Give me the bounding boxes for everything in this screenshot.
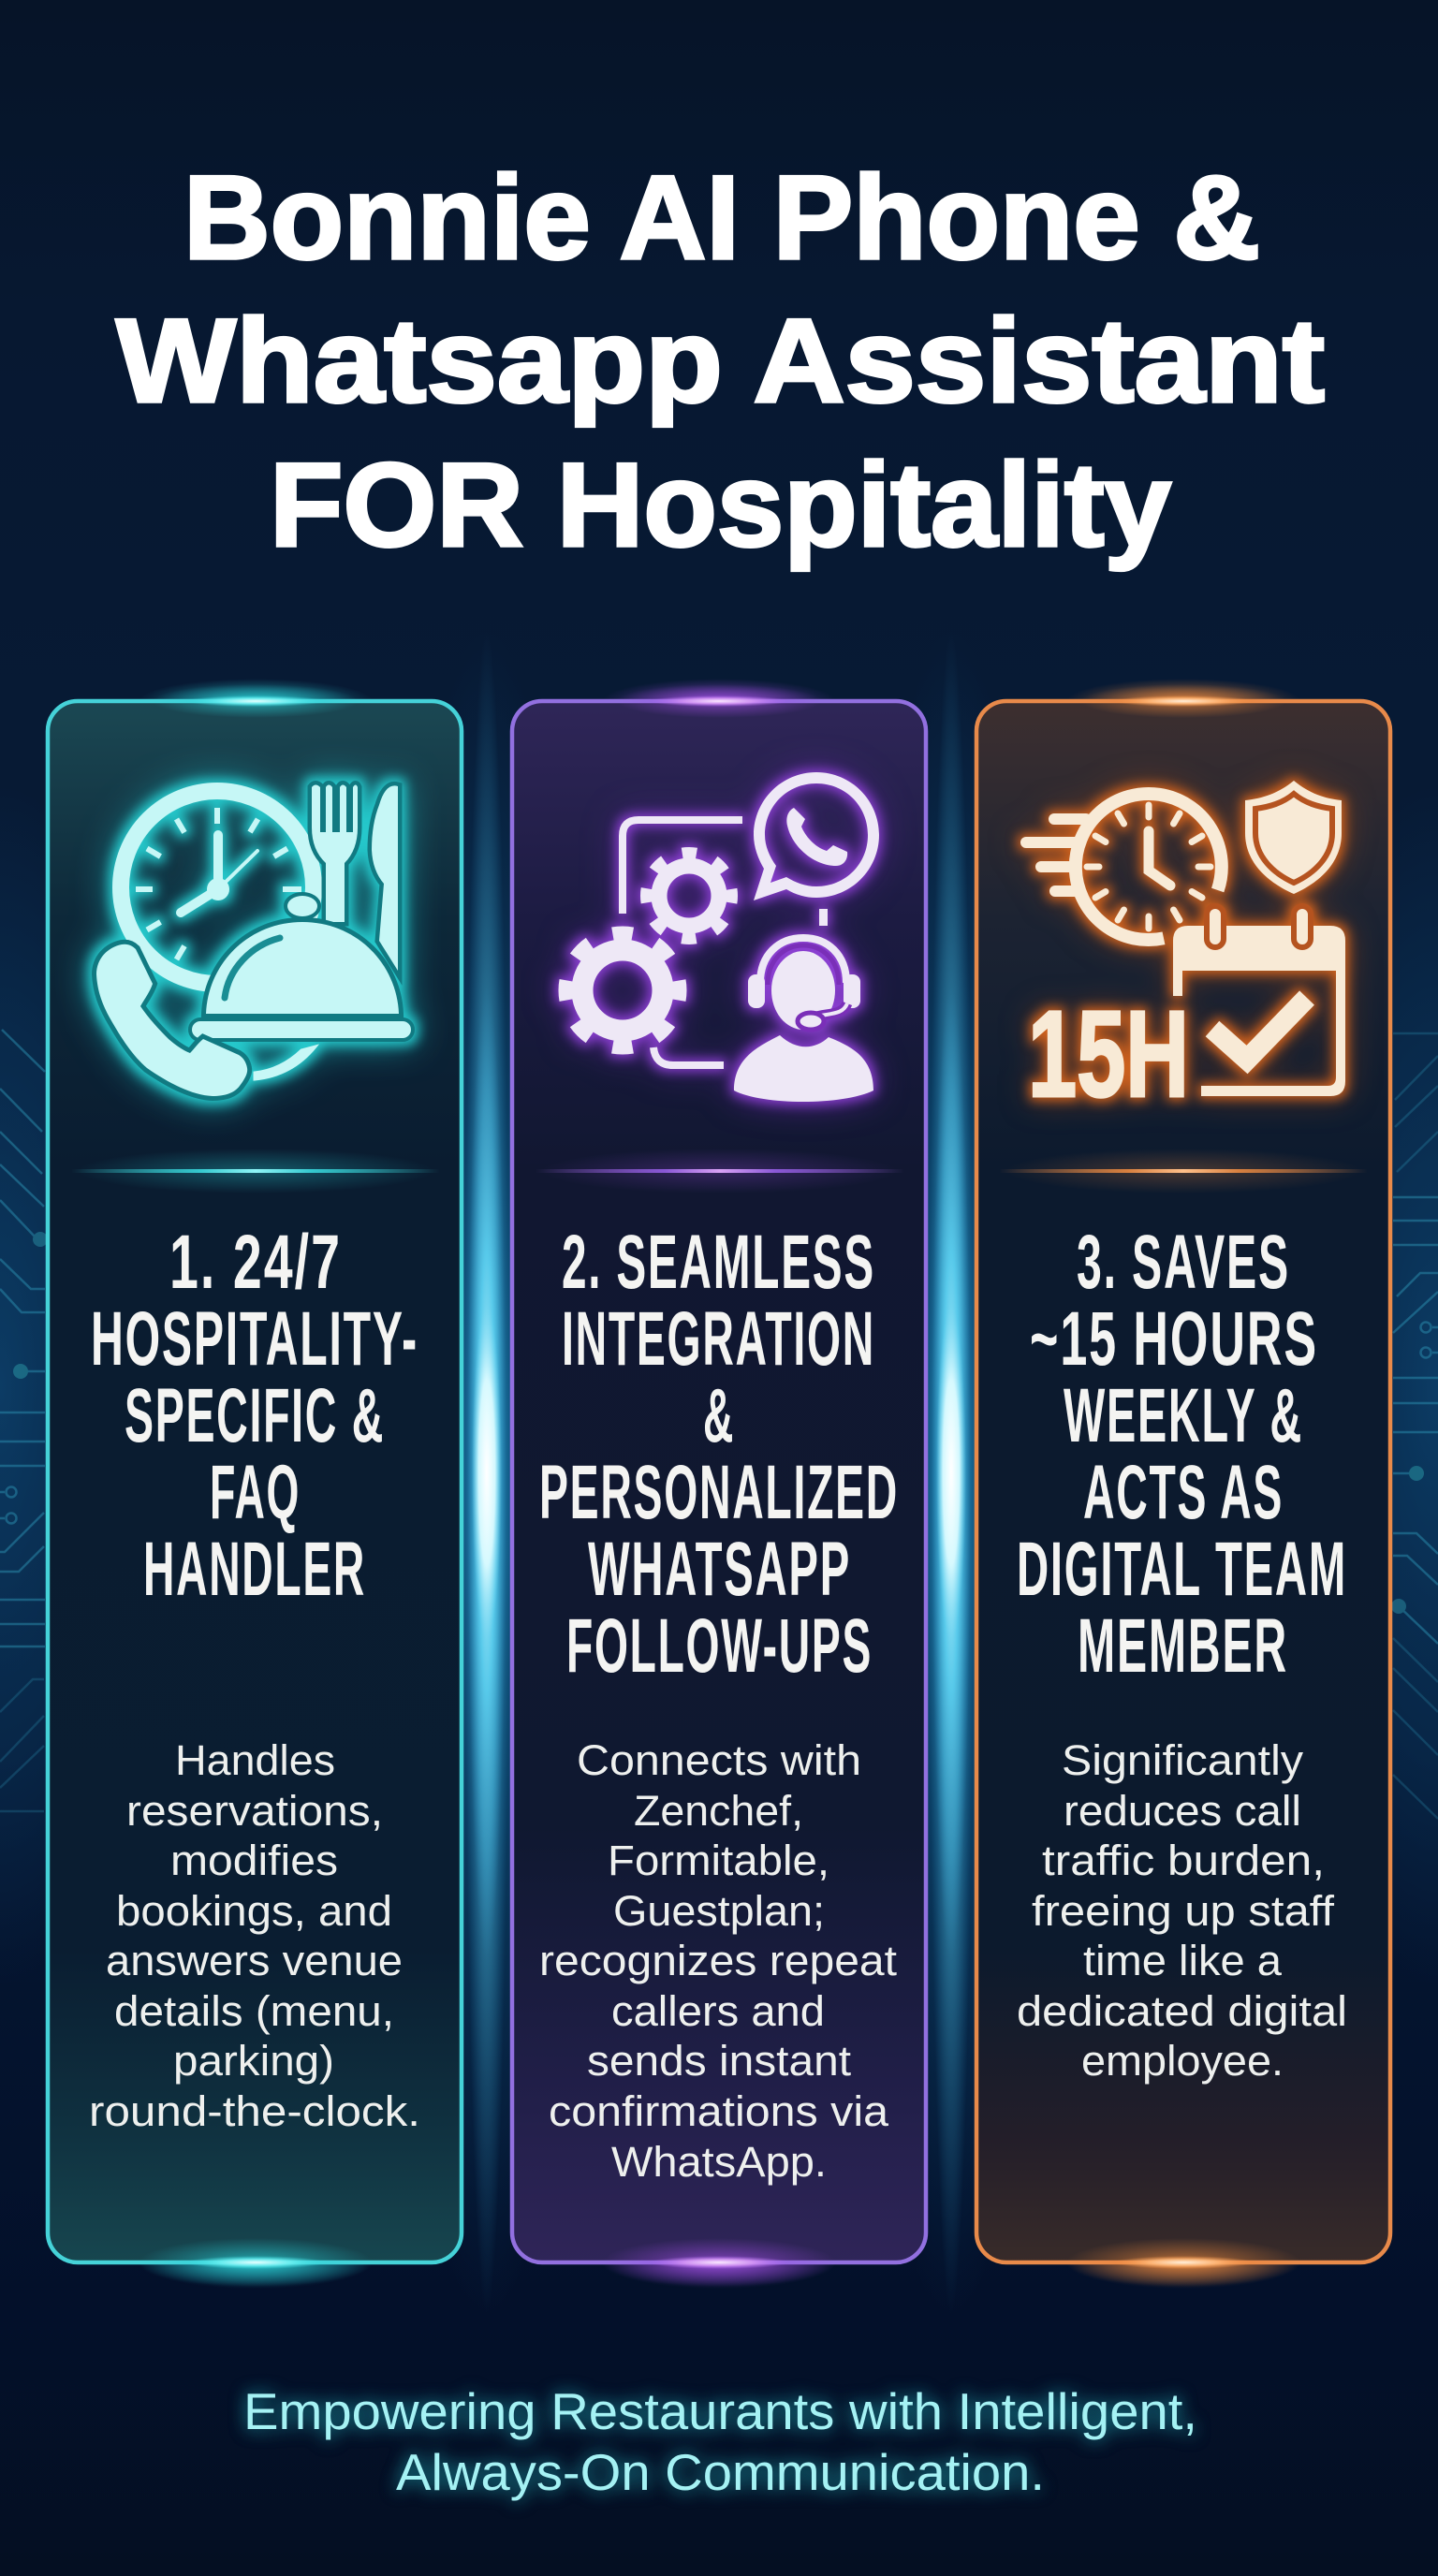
body text: bookings, and — [116, 1887, 392, 1935]
heading: FOLLOW-UPS — [566, 1603, 873, 1689]
icon: fast clock, shield, calendar and 15H: 15H — [1028, 985, 1189, 1122]
body text: freeing up staff — [1032, 1887, 1335, 1935]
footer tagline: Always-On Communication. — [396, 2443, 1045, 2501]
heading — [91, 1220, 418, 1612]
light beam: right separator — [844, 630, 1059, 2315]
heading — [1017, 1220, 1347, 1689]
heading: INTEGRATION — [562, 1296, 875, 1382]
body text: time like a — [1083, 1937, 1283, 1984]
body text: callers and — [611, 1987, 825, 2035]
body text: sends instant — [587, 2037, 852, 2085]
heading: FAQ — [210, 1450, 301, 1535]
card frame — [976, 679, 1390, 2289]
heading: PERSONALIZED — [539, 1450, 899, 1535]
light beam: left separator — [379, 630, 594, 2315]
small gear — [647, 854, 731, 938]
heading: & — [703, 1373, 735, 1458]
panel: 24/7 hospitality handler — [48, 679, 462, 2289]
icon: clock, phone, cloche and cutlery — [96, 784, 411, 1096]
body text: confirmations via — [549, 2087, 889, 2135]
large gear — [566, 934, 679, 1046]
heading: WHATSAPP — [588, 1527, 851, 1612]
headset agent — [760, 938, 846, 983]
divider — [71, 1149, 440, 1193]
body text: answers venue — [106, 1937, 403, 1984]
body text — [1017, 1736, 1347, 2085]
icon: fast clock, shield, calendar and 15H — [1026, 781, 1345, 1122]
heading: 1. 24/7 — [169, 1220, 342, 1305]
heading: MEMBER — [1078, 1603, 1288, 1689]
heading — [539, 1220, 899, 1689]
card frame — [512, 679, 926, 2289]
footer tagline: Empowering Restaurants with Intelligent, — [243, 2382, 1197, 2440]
title: Bonnie AI Phone & — [183, 151, 1260, 284]
body text: reduces call — [1064, 1787, 1301, 1835]
body text: details (menu, — [114, 1987, 394, 2035]
panel: saves 15 hours weekly — [976, 679, 1390, 2289]
body text: Zenchef, — [634, 1787, 803, 1835]
body text: Guestplan; — [613, 1887, 825, 1935]
body text: WhatsApp. — [611, 2138, 827, 2186]
divider — [999, 1149, 1368, 1193]
body text: Formitable, — [608, 1837, 829, 1884]
footer tagline — [243, 2382, 1197, 2501]
WhatsApp bubble — [754, 772, 879, 900]
circuit pattern: left edge — [0, 1030, 48, 1811]
body text: traffic burden, — [1042, 1837, 1325, 1884]
body text: reservations, — [126, 1787, 383, 1835]
divider — [536, 1149, 904, 1193]
body text: Significantly — [1062, 1736, 1304, 1784]
body text — [539, 1736, 898, 2186]
heading: SPECIFIC & — [125, 1373, 385, 1458]
heading: HANDLER — [143, 1527, 366, 1612]
body text: parking) — [173, 2037, 334, 2085]
title: FOR Hospitality — [270, 438, 1171, 571]
body text — [89, 1736, 420, 2135]
title — [116, 151, 1325, 571]
heading: HOSPITALITY- — [91, 1296, 418, 1382]
body text: recognizes repeat — [539, 1937, 898, 1984]
body text: employee. — [1081, 2037, 1284, 2085]
panel: seamless integration — [512, 679, 926, 2289]
title: Whatsapp Assistant — [116, 294, 1325, 427]
heading: ACTS AS — [1083, 1450, 1284, 1535]
heading: 2. SEAMLESS — [562, 1220, 875, 1305]
body text: Connects with — [577, 1736, 861, 1784]
body text: modifies — [170, 1837, 338, 1884]
body text: round-the-clock. — [89, 2087, 420, 2135]
body text: Handles — [175, 1736, 335, 1784]
circuit pattern: right edge — [1391, 1033, 1438, 1819]
body text: dedicated digital — [1017, 1987, 1347, 2035]
icon: gears, WhatsApp bubble and headset agent — [566, 772, 879, 1102]
heading: 3. SAVES — [1077, 1220, 1290, 1305]
card frame — [48, 679, 462, 2289]
